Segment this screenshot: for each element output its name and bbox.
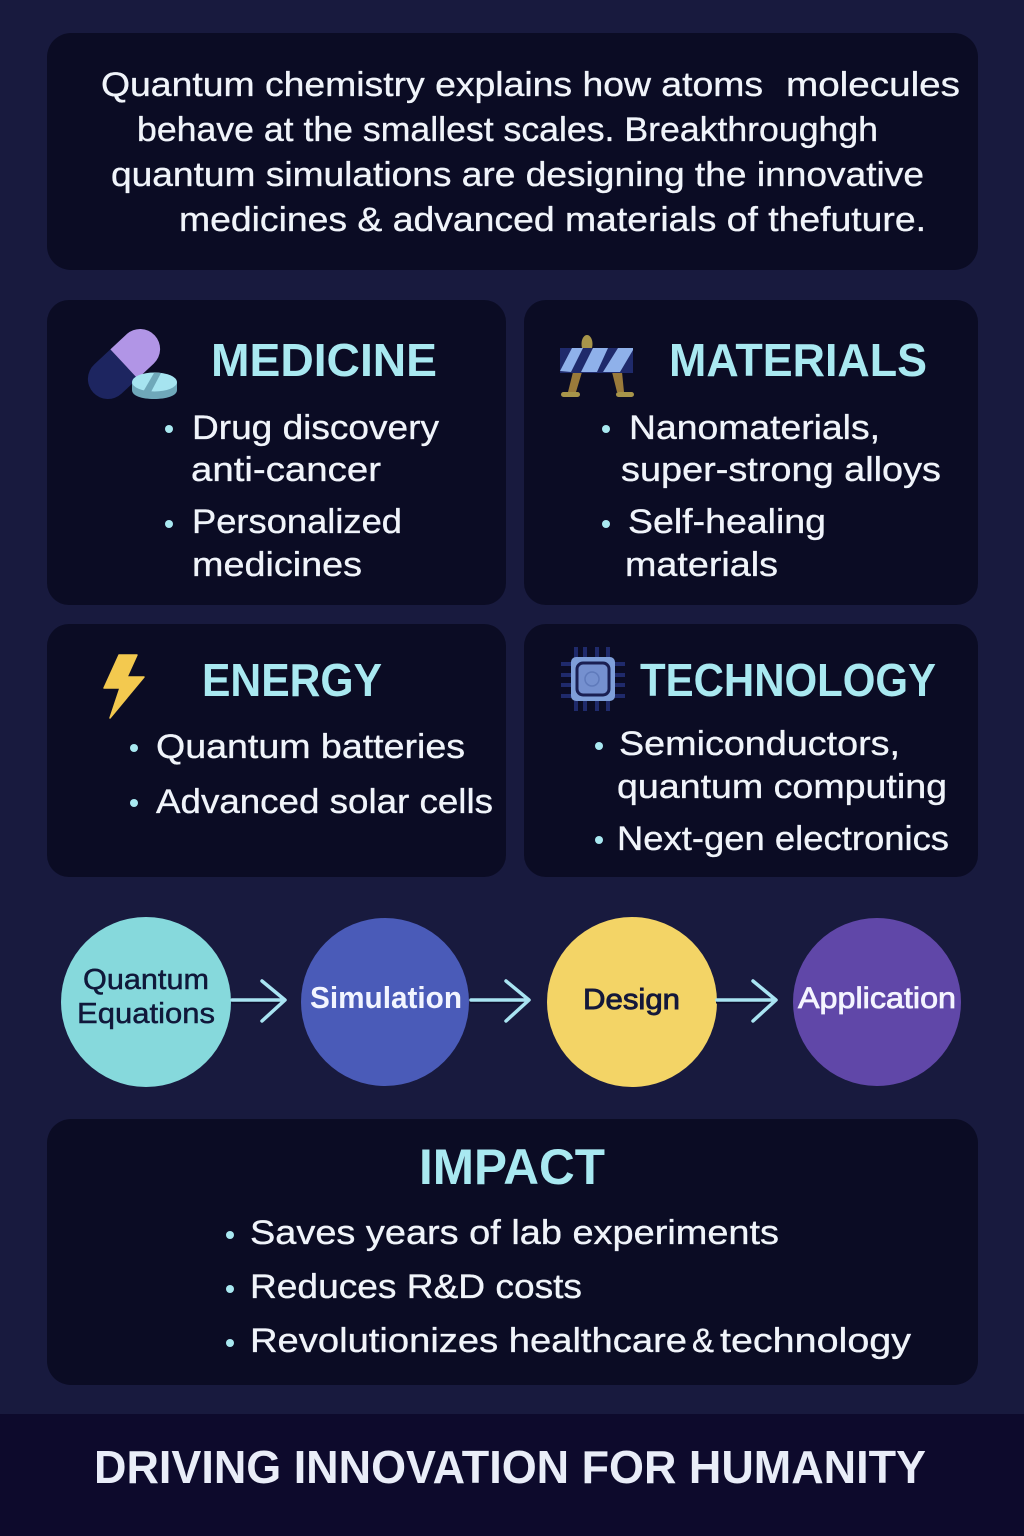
step: application xyxy=(793,918,961,1086)
medicine bullets: medicines xyxy=(192,546,362,584)
panel: materials xyxy=(524,300,978,605)
medicine bullets: anti-cancer xyxy=(191,451,381,489)
footer band xyxy=(0,1414,1024,1536)
intro text xyxy=(101,66,960,239)
technology bullets: Next-gen electronics xyxy=(617,820,949,858)
arrow xyxy=(716,981,776,1021)
materials bullets: Nanomaterials, xyxy=(629,409,880,447)
materials bullets: Self-healing xyxy=(628,503,826,541)
intro text: Quantum chemistry explains how atoms xyxy=(101,66,763,104)
energy bullets: Quantum batteries xyxy=(156,728,465,766)
heading: materials: MATERIALS xyxy=(669,334,927,386)
medicine bullets: Drug discovery xyxy=(192,409,439,447)
impact bullets: & xyxy=(692,1322,714,1360)
intro text: behave at the smallest scales. Breakthroughgh xyxy=(137,111,878,149)
impact bullets xyxy=(226,1214,911,1360)
intro text: molecules xyxy=(786,66,960,104)
materials bullets xyxy=(602,409,941,584)
arrow xyxy=(231,981,285,1021)
arrow xyxy=(470,981,529,1021)
heading: medicine: MEDICINE xyxy=(211,334,437,386)
step: quantum equations: Equations xyxy=(77,998,215,1030)
panel: technology xyxy=(524,624,978,877)
impact bullets: Saves years of lab experiments xyxy=(250,1214,779,1252)
panel: medicine xyxy=(47,300,506,605)
medicine bullets xyxy=(165,409,439,584)
step: simulation xyxy=(301,918,469,1086)
technology bullets xyxy=(595,725,949,858)
process flow xyxy=(61,917,961,1087)
step: quantum equations: Quantum xyxy=(83,964,209,996)
technology bullets: Semiconductors, xyxy=(619,725,900,763)
medicine bullets: Personalized xyxy=(192,503,402,541)
intro text: medicines & advanced materials of thefuture. xyxy=(179,201,926,239)
impact bullets: technology xyxy=(720,1322,911,1360)
heading: impact: IMPACT xyxy=(419,1139,605,1195)
heading: energy: ENERGY xyxy=(202,654,382,706)
heading: technology: TECHNOLOGY xyxy=(640,654,936,706)
panel: introduction xyxy=(47,33,978,270)
panel: energy xyxy=(47,624,506,877)
icon: striped barrier xyxy=(560,335,634,397)
intro text: quantum simulations are designing the innovative xyxy=(111,156,924,194)
materials bullets: super-strong alloys xyxy=(621,451,941,489)
step: design: Design xyxy=(583,984,680,1016)
technology bullets: quantum computing xyxy=(617,768,947,806)
impact bullets: Reduces R&D costs xyxy=(250,1268,582,1306)
step: design xyxy=(547,917,717,1087)
icon: microchip xyxy=(561,647,625,711)
panel: impact xyxy=(47,1119,978,1385)
step: simulation: Simulation xyxy=(310,980,462,1015)
footer text: DRIVING INNOVATION FOR HUMANITY xyxy=(94,1441,926,1493)
energy bullets xyxy=(130,728,493,821)
energy bullets: Advanced solar cells xyxy=(156,783,493,821)
step: quantum equations xyxy=(61,917,231,1087)
step: application: Application xyxy=(798,982,956,1015)
icon: lightning bolt xyxy=(104,655,144,718)
materials bullets: materials xyxy=(625,546,778,584)
icon: pill capsule and tablet xyxy=(80,321,177,407)
impact bullets: Revolutionizes healthcare xyxy=(250,1322,687,1360)
